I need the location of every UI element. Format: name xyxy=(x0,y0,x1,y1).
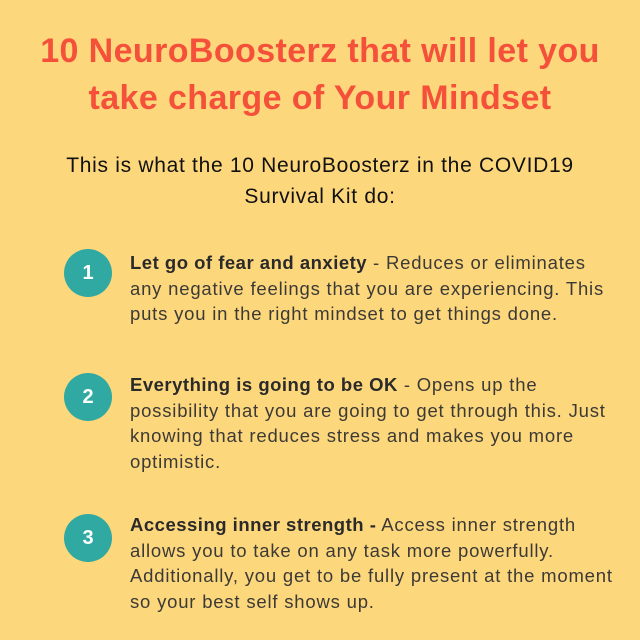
icon: number 3 xyxy=(64,514,112,562)
text: item 2 xyxy=(130,374,606,472)
icon: number 1: 1 xyxy=(82,262,94,284)
text: item 2: optimistic. xyxy=(130,450,221,472)
title xyxy=(40,32,600,117)
title: 10 NeuroBoosterz that will let you xyxy=(40,32,600,70)
icon: number 1 xyxy=(64,249,112,297)
text: item 1: puts you in the right mindset to get things done. xyxy=(130,303,558,324)
icon: number 3: 3 xyxy=(82,527,94,549)
subtitle: This is what the 10 NeuroBoosterz in the COVID19 xyxy=(66,154,574,177)
text: item 3 xyxy=(130,514,613,612)
text: item 3: Accessing inner strength - Access inner strength xyxy=(130,514,576,535)
icon: number 2: 2 xyxy=(82,386,94,408)
text: item 3: so your best self shows up. xyxy=(130,590,375,612)
text: item 1 xyxy=(130,252,604,324)
title: take charge of Your Mindset xyxy=(88,79,551,117)
text: item 1: Let go of fear and anxiety - Reduces or eliminates xyxy=(130,252,586,273)
text: item 2: Everything is going to be OK - Opens up the xyxy=(130,374,537,395)
text: item 1: any negative feelings that you are experiencing. This xyxy=(130,278,604,298)
text: item 2: possibility that you are going to get through this. Just xyxy=(130,400,606,420)
text: item 2: knowing that reduces stress and makes you more xyxy=(130,425,574,446)
icon: number 2 xyxy=(64,373,112,421)
subtitle xyxy=(66,154,574,208)
text: item 3: Additionally, you get to be fully present at the moment xyxy=(130,565,613,586)
subtitle: Survival Kit do: xyxy=(244,185,396,208)
text: item 3: allows you to take on any task more powerfully. xyxy=(130,540,554,560)
